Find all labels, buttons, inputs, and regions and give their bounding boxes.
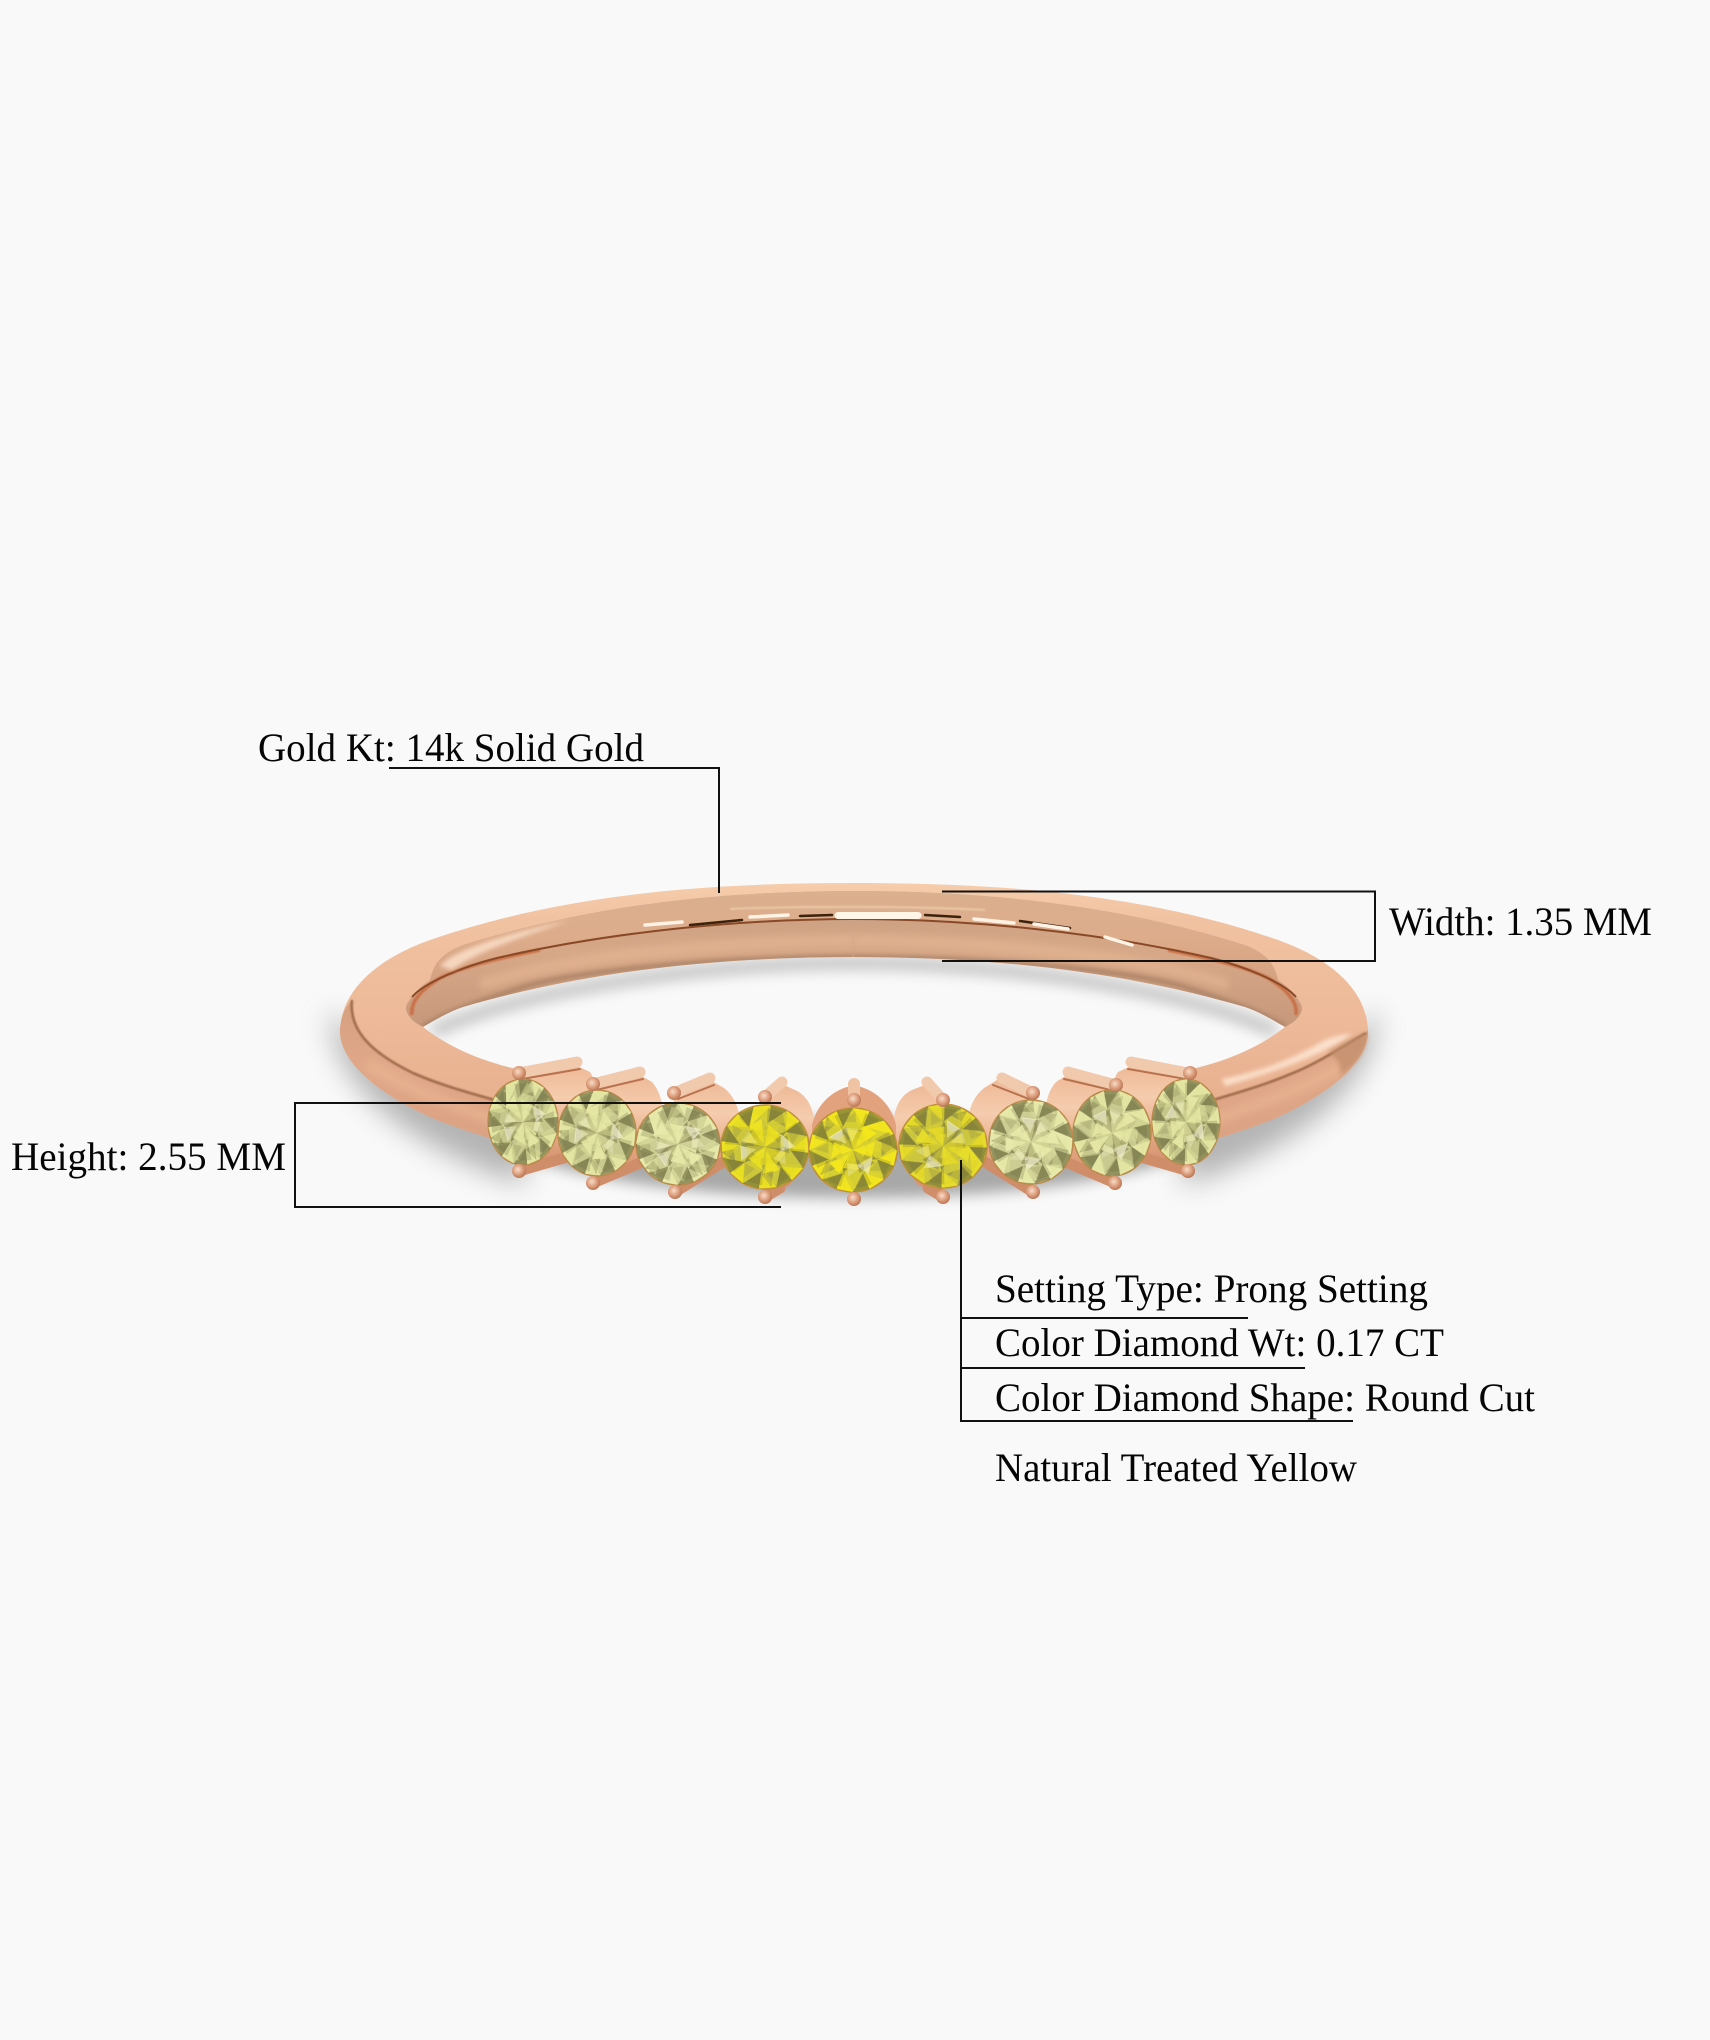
left side face (340, 1000, 520, 1148)
gold karat leader line (389, 768, 719, 893)
stone 4 setting (705, 1082, 825, 1204)
inner left highlight (440, 920, 570, 970)
right band highlight (1222, 1034, 1352, 1086)
stone 3 setting (624, 1078, 740, 1199)
right band corner shade (1328, 1032, 1367, 1076)
stone 1 setting (478, 1062, 597, 1178)
height label: Height: 2.55 MM (11, 1134, 286, 1179)
setting type label: Setting Type: Prong Setting (995, 1266, 1428, 1311)
right side sheen (1208, 1066, 1340, 1122)
diamond treatment label: Natural Treated Yellow (995, 1445, 1357, 1490)
groove reflections (645, 915, 1132, 945)
diamond weight label: Color Diamond Wt: 0.17 CT (995, 1320, 1444, 1365)
gold karat label: Gold Kt: 14k Solid Gold (258, 725, 644, 770)
callout: diamond details (961, 1160, 1535, 1490)
width bracket (942, 892, 1375, 961)
stone 7 setting (968, 1078, 1090, 1201)
right crease (1203, 1033, 1366, 1103)
ring band (340, 883, 1368, 1148)
stone 2 setting (542, 1072, 663, 1194)
left side sheen (368, 1062, 500, 1122)
upper band highlight line (730, 907, 985, 910)
width label: Width: 1.35 MM (1389, 899, 1652, 944)
stone 5 setting (796, 1084, 910, 1206)
callout: width (942, 892, 1652, 961)
stone 8 setting (1045, 1072, 1162, 1190)
stone settings row (478, 1062, 1230, 1206)
stone 9 setting (1111, 1062, 1230, 1178)
left half of band (340, 883, 856, 1148)
diamond leader lines (961, 1160, 1353, 1421)
ground shadow of ring (330, 963, 1378, 1198)
right half of band (852, 883, 1368, 1148)
callout: gold karat (258, 725, 719, 893)
stone 6 setting (887, 1082, 999, 1204)
left crease (352, 1000, 505, 1103)
infographic canvas (12, 733, 1651, 1482)
right side face (1188, 1030, 1368, 1148)
diamond shape label: Color Diamond Shape: Round Cut (995, 1375, 1535, 1420)
callout: height (11, 1103, 781, 1207)
height bracket (295, 1103, 781, 1207)
